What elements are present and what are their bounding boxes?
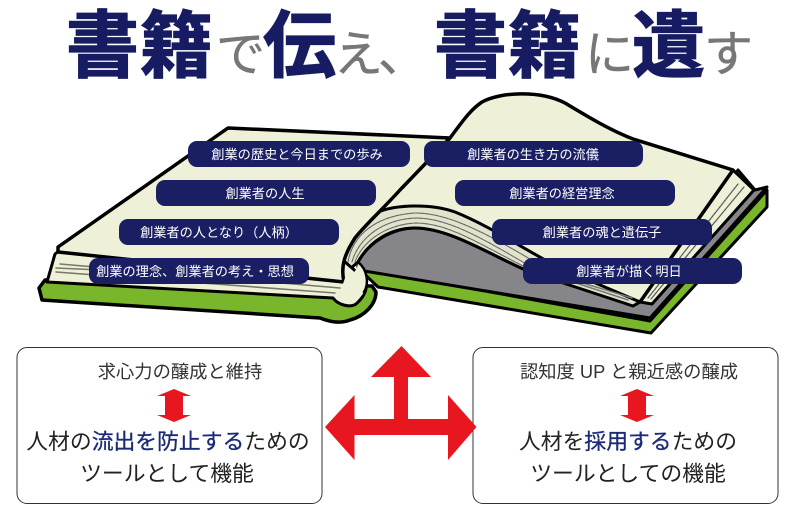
book: spine knob (338, 262, 366, 302)
title: 籍 (508, 6, 581, 87)
book: right page (343, 94, 733, 302)
title: 籍 (140, 6, 213, 87)
title: 、 (378, 28, 427, 82)
pill: management: 創業者の経営理念 (509, 186, 615, 201)
book: curved page stack at gutter (343, 206, 640, 306)
title: 書 (66, 6, 139, 87)
panel text: loyalty: 求心力の醸成と維持 (98, 361, 262, 382)
book cover: right gray inner (358, 170, 767, 318)
pill: history: 創業の歴史と今日までの歩み (211, 147, 383, 162)
title: 遺 (632, 6, 705, 87)
icon: small double arrow right (620, 389, 654, 422)
pill: tomorrow (523, 258, 742, 284)
title: 書 (434, 6, 507, 87)
pill: management (455, 180, 675, 206)
book: left page (58, 128, 450, 282)
pill: way of life: 創業者の生き方の流儀 (467, 147, 599, 162)
title: え (334, 28, 383, 82)
panel text: hire: 人材を採用するための (519, 429, 737, 454)
book: left page block (47, 250, 366, 306)
pill: life: 創業者の人生 (225, 186, 305, 201)
pill: soul: 創業者の魂と遺伝子 (543, 225, 661, 240)
title: に (585, 28, 634, 82)
panel text: tool function: ツールとして機能 (80, 461, 254, 486)
pill: life (156, 180, 376, 206)
pill: history (188, 141, 410, 167)
title (66, 6, 753, 87)
pill: soul (492, 219, 712, 245)
book cover: left green edge (39, 280, 376, 322)
panel: retention (17, 348, 322, 504)
pill: philosophy (89, 258, 309, 284)
pill: personality (119, 219, 339, 245)
pill: tomorrow: 創業者が描く明日 (576, 264, 682, 279)
pill: way of life (424, 141, 643, 167)
panel text: tool function: ツールとしての機能 (530, 461, 726, 486)
icon: small double arrow left (157, 389, 191, 422)
panel text: prevent turnover: 人材の流出を防止するための (26, 429, 310, 454)
icon: large red three-way arrow (325, 346, 476, 460)
book cover: right green edge (358, 190, 767, 333)
title: す (704, 28, 753, 82)
pill: philosophy: 創業の理念、創業者の考え・思想 (96, 264, 294, 279)
pill: personality: 創業者の人となり（人柄） (140, 225, 298, 240)
illustration: open book (39, 94, 767, 333)
title: で (216, 28, 265, 82)
book: right page edge block (640, 170, 754, 304)
panel text: awareness: 認知度 UP と親近感の醸成 (520, 361, 738, 382)
title: 伝 (263, 6, 336, 87)
panel: recruitment (473, 348, 778, 504)
